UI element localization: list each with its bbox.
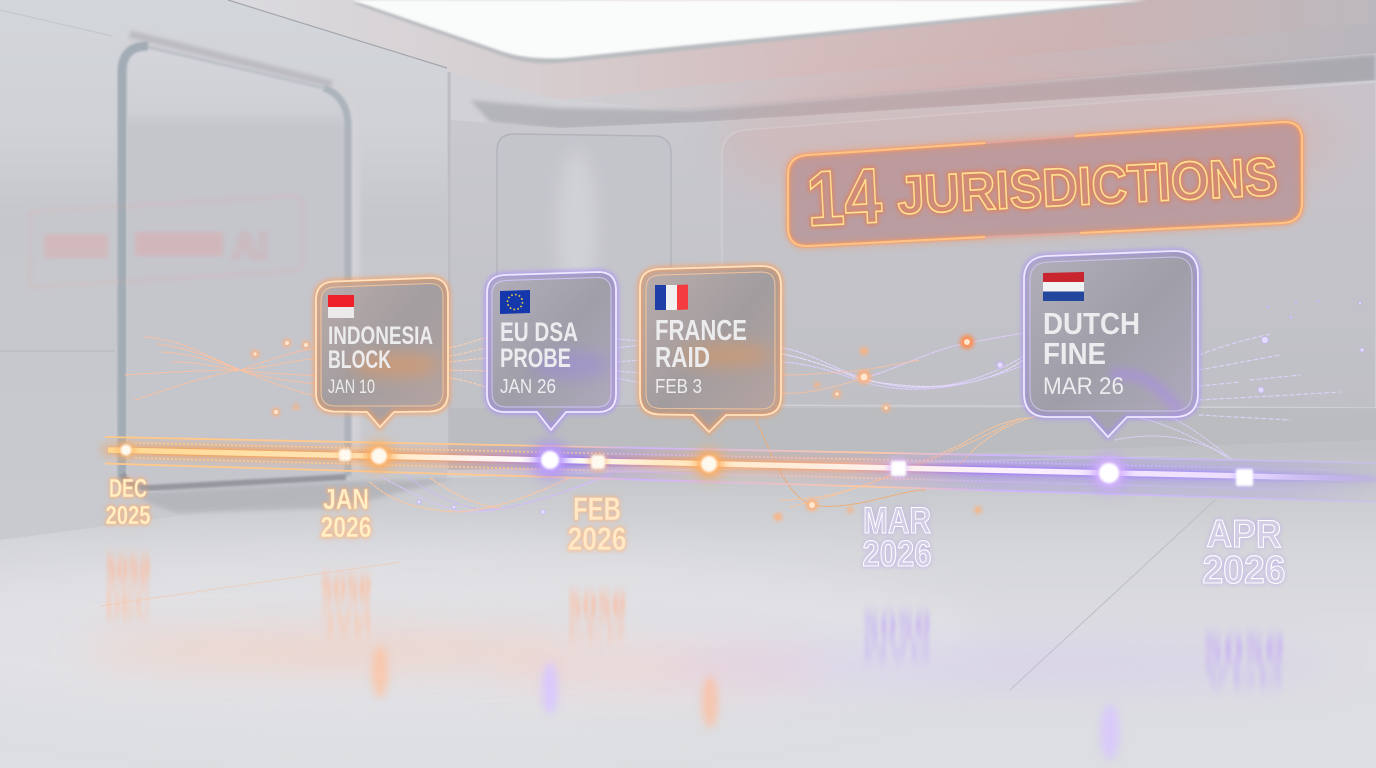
reflected month labels: 2026 [568,587,626,623]
month label: JAN 2026: JAN [323,484,369,516]
node streak reflections [372,646,1120,760]
reflected month labels: APR [1203,656,1285,695]
month label: APR 2026 [1202,513,1286,592]
sign headline text: 14 [804,151,884,243]
reflected month labels: JAN [320,600,372,641]
sign glow on walls [720,65,1340,215]
month label: APR 2026: APR [1206,513,1282,556]
timeline dotted data rails [135,443,1340,491]
month label: MAR 2026: 2026 [862,533,932,574]
ceiling [228,0,1376,130]
card text: RAID [655,342,710,374]
card text: EU DSA [500,317,578,347]
sign headline text [804,147,1279,243]
card text [655,315,747,398]
month label: FEB 2026: 2026 [568,521,626,557]
wave: France to Dutch [782,333,1024,393]
month label: FEB 2026: 2026 [568,521,626,557]
flag: EU [500,290,530,314]
card text: JAN 26 [500,376,556,398]
card text: FRANCE [655,315,747,347]
event card: EU DSA probe [487,272,616,430]
ghost reflection of sign in door [30,196,302,287]
card text [328,322,433,398]
month label: MAR 2026 [862,500,932,574]
back wall [450,80,1376,470]
timeline band [105,437,1376,502]
ghost reflection of sign in door: AI [232,225,268,266]
timeline main beam [108,450,1376,479]
flag: Netherlands [1043,272,1084,301]
month label: APR 2026: 2026 [1202,549,1286,592]
month label: DEC 2025: DEC [109,473,147,503]
event card: Indonesia block [316,278,448,427]
card text: INDONESIA [328,322,433,350]
card text: BLOCK [328,346,391,374]
card text: PROBE [500,343,571,373]
month label: MAR 2026: 2026 [862,533,932,574]
month label: JAN 2026 [320,484,372,544]
card text: FEB 3 [655,376,702,398]
node markers [118,442,1253,489]
event card: France raid [640,266,781,432]
reflected month labels: 2026 [320,570,372,607]
particle waves [125,333,1340,512]
month label: MAR 2026: MAR [863,500,931,541]
left wall [0,0,447,540]
month label: APR 2026: APR [1206,513,1282,556]
wave: right of Dutch [1199,334,1340,420]
card text: JAN 10 [328,377,375,398]
month label: APR 2026: 2026 [1202,549,1286,592]
reflected month labels: 2026 [1203,628,1285,669]
wave: under timeline right [756,415,1232,507]
month label: DEC 2025: 2025 [106,500,150,530]
base band [450,408,1376,470]
timeline [100,437,1376,502]
reflected month labels: MAR [862,634,932,667]
sign headline text: 14 [804,151,884,243]
flag: Indonesia [328,295,354,318]
card text: DUTCH [1043,306,1140,341]
neon sign: 14 JURISDICTIONS [788,122,1302,246]
reflected month labels: DEC [106,581,150,624]
month label: FEB 2026: FEB [573,491,621,527]
card text [500,317,578,398]
event card: Dutch fine [1024,251,1198,437]
reflected month labels: 2025 [106,551,150,588]
sign headline text: JURISDICTIONS [896,147,1279,226]
card text [1043,306,1140,400]
wave: between EU and France [617,339,640,383]
sign panel [788,122,1302,246]
month label: FEB 2026: FEB [573,491,621,527]
flag: France [655,284,688,310]
reflected month labels: FEB [567,616,627,644]
wave: between Indonesia and EU [449,338,486,387]
card text: MAR 26 [1043,373,1124,400]
reflected month labels [106,551,1285,695]
sign headline text: JURISDICTIONS [896,147,1279,226]
timeline thin rails [105,437,1376,502]
wall panels [497,82,1376,408]
month label: FEB 2026 [568,491,626,557]
month label: DEC 2025: 2025 [106,500,150,530]
floor reflections [80,551,1340,760]
card text: FINE [1043,336,1106,371]
month label: JAN 2026: 2026 [320,512,372,544]
door [120,34,455,513]
floor [0,450,1376,768]
particle dots [251,300,1364,521]
reflected month labels: 2026 [862,606,932,642]
month label: MAR 2026: MAR [863,500,931,541]
timeline glow [100,450,1376,479]
month label: DEC 2025 [106,473,150,530]
wave: left orange [125,337,318,400]
sign neon border [788,122,1302,246]
month label: JAN 2026: JAN [323,484,369,516]
month label: DEC 2025: DEC [109,473,147,503]
month label: JAN 2026: 2026 [320,512,372,544]
wave: under timeline left [370,470,620,512]
